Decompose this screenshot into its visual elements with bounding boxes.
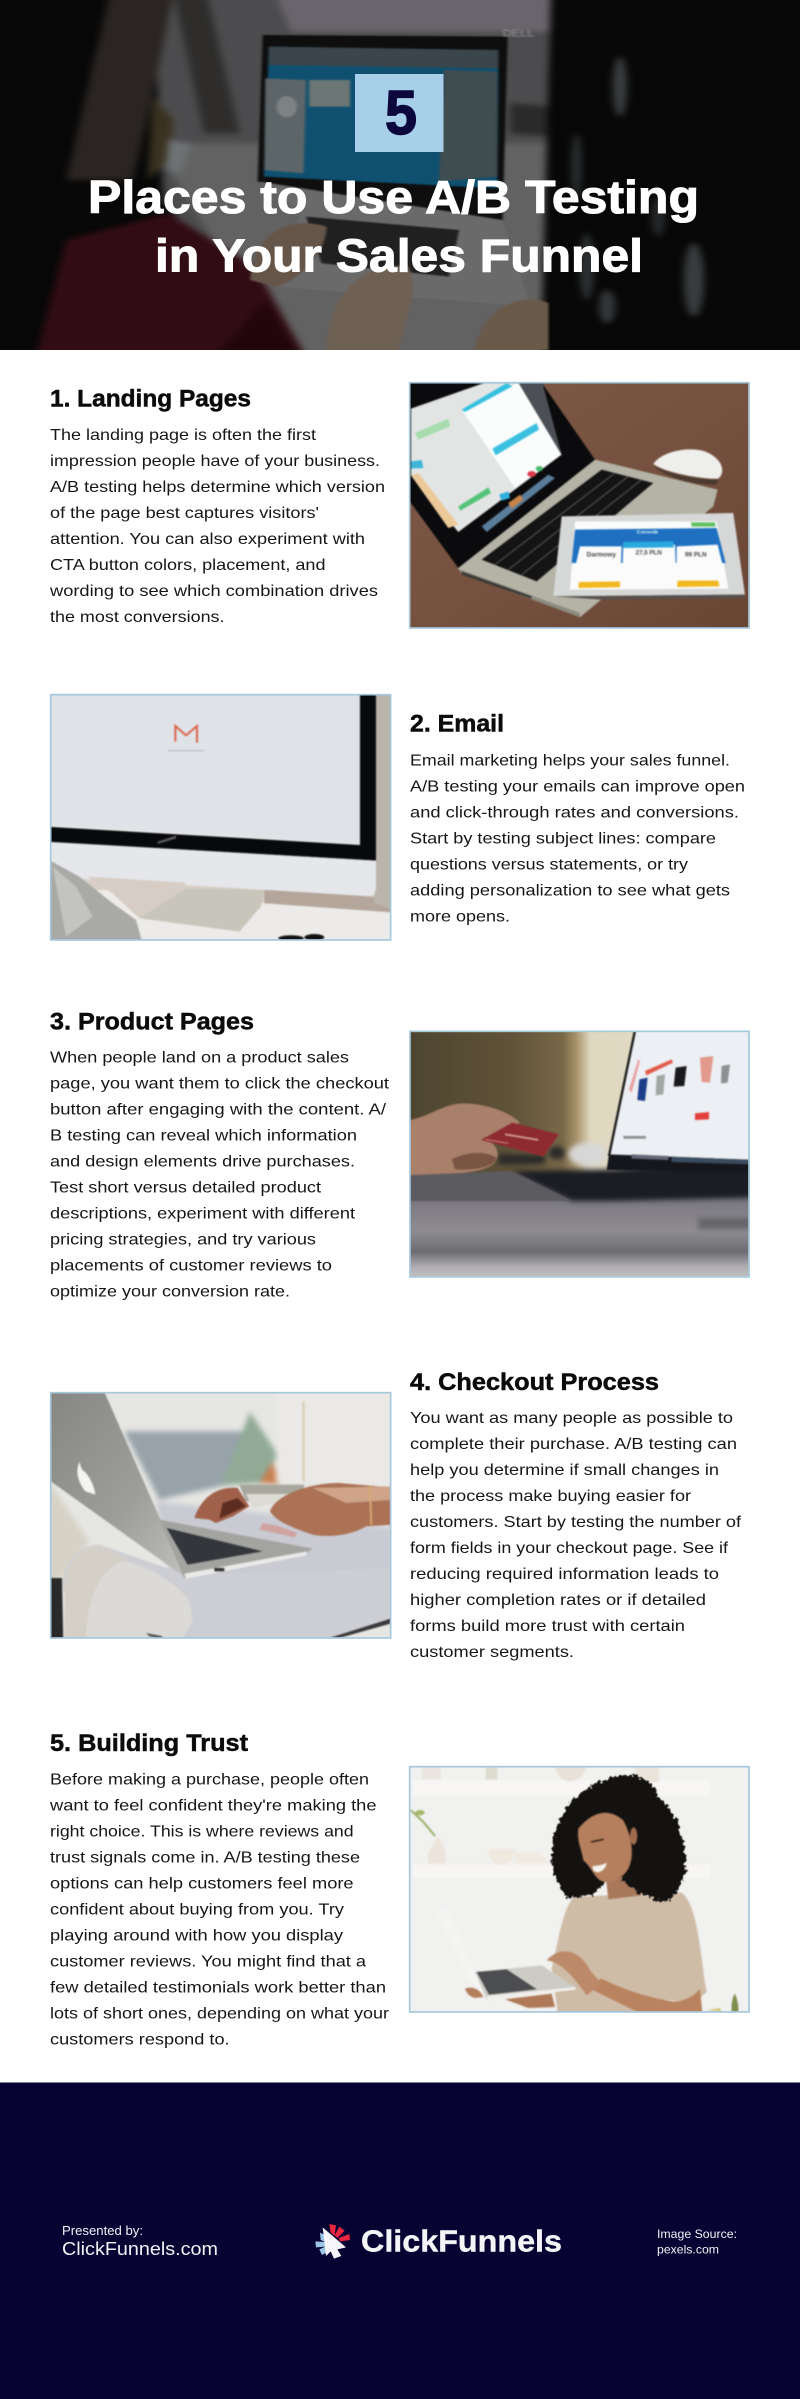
body text 3: optimize your conversion rate. bbox=[50, 1283, 290, 1300]
body text 1: The landing page is often the first bbox=[50, 427, 317, 444]
hero background photo: DELL bbox=[503, 27, 534, 39]
body text 2 bbox=[410, 753, 745, 926]
body text 5: options can help customers feel more bbox=[50, 1876, 354, 1892]
body text 3: button after engaging with the content. A/ bbox=[50, 1101, 387, 1118]
body text 3: When people land on a product sales bbox=[50, 1049, 349, 1066]
photo: person paying by card on silver laptop bbox=[46, 1388, 396, 1644]
body text 4: the process make buying easier for bbox=[410, 1488, 692, 1505]
body text 3: and design elements drive purchases. bbox=[50, 1153, 355, 1170]
body text 1: the most conversions. bbox=[50, 609, 225, 626]
body text 5: trust signals come in. A/B testing these bbox=[50, 1850, 360, 1866]
body text 3: placements of customer reviews to bbox=[50, 1257, 332, 1274]
body text 2: adding personalization to see what gets bbox=[410, 883, 730, 900]
presented by credit bbox=[62, 2223, 218, 2259]
presented by credit: Presented by: bbox=[62, 2223, 143, 2238]
body text 1: of the page best captures visitors' bbox=[50, 505, 319, 522]
logo wordmark: ClickFunnels bbox=[361, 2224, 562, 2259]
heading 2: 2. Email bbox=[410, 710, 504, 738]
heading 4: 4. Checkout Process bbox=[410, 1369, 659, 1396]
section 1: landing pages bbox=[49, 378, 755, 634]
body text 5: right choice. This is where reviews and bbox=[50, 1824, 354, 1840]
body text 4: customer segments. bbox=[410, 1644, 574, 1661]
body text 3: descriptions, experiment with different bbox=[50, 1205, 356, 1222]
body text 4: customers. Start by testing the number of bbox=[410, 1514, 742, 1531]
section 4: checkout process bbox=[46, 1369, 742, 1661]
body text 4: complete their purchase. A/B testing can bbox=[410, 1436, 737, 1453]
body text 4: You want as many people as possible to bbox=[410, 1410, 733, 1427]
body text 3 bbox=[50, 1049, 390, 1300]
body text 2: questions versus statements, or try bbox=[410, 857, 688, 874]
body text 5: want to feel confident they're making the bbox=[49, 1798, 377, 1814]
photo: laptop and tablet on wood desk: Darmowy bbox=[587, 552, 617, 558]
body text 4: higher completion rates or if detailed bbox=[410, 1592, 706, 1609]
logo icon: cursor with burst bbox=[315, 2224, 350, 2259]
photo: laptop and tablet on wood desk: 99 PLN bbox=[685, 552, 707, 558]
photo: monitor with Gmail logo bbox=[46, 690, 396, 946]
body text 5: playing around with how you display bbox=[50, 1928, 343, 1944]
body text 1: attention. You can also experiment with bbox=[50, 531, 365, 548]
photo: hand holding red credit card at laptop bbox=[405, 1026, 755, 1282]
body text 3: B testing can reveal which information bbox=[50, 1127, 357, 1144]
body text 1: wording to see which combination drives bbox=[49, 583, 378, 600]
photo: laptop and tablet on wood desk: 27,5 PLN bbox=[636, 551, 662, 557]
number badge bbox=[355, 74, 444, 152]
neck bbox=[606, 1876, 642, 1900]
body text 3: page, you want them to click the checkout bbox=[50, 1075, 390, 1092]
image source credit: pexels.com bbox=[657, 2242, 719, 2256]
hero title: Places to Use A/B Testing bbox=[88, 171, 699, 223]
hero title bbox=[88, 171, 699, 282]
body text 5: lots of short ones, depending on what your bbox=[50, 2006, 390, 2022]
image source credit bbox=[657, 2227, 737, 2256]
body text 1: CTA button colors, placement, and bbox=[50, 557, 326, 574]
footer bbox=[0, 2082, 800, 2399]
body text 4: forms build more trust with certain bbox=[410, 1618, 685, 1635]
heading 1: 1. Landing Pages bbox=[50, 386, 251, 412]
body text 5: Before making a purchase, people often bbox=[50, 1772, 369, 1788]
body text 4: form fields in your checkout page. See if bbox=[410, 1540, 729, 1557]
photo: laptop and tablet on wood desk bbox=[405, 378, 755, 634]
body text 2: more opens. bbox=[410, 909, 510, 926]
photo: laptop and tablet on wood desk: Cennik bbox=[637, 530, 659, 535]
body text 3: Test short versus detailed product bbox=[50, 1179, 322, 1196]
body text 1: impression people have of your business. bbox=[50, 453, 380, 470]
hero background photo bbox=[0, 0, 800, 357]
body text 5: customer reviews. You might find that a bbox=[50, 1954, 366, 1970]
section 5: building trust bbox=[49, 1730, 755, 2048]
body text 5: confident about buying from you. Try bbox=[50, 1902, 344, 1918]
hero title: in Your Sales Funnel bbox=[155, 230, 643, 282]
body text 2: A/B testing your emails can improve open bbox=[410, 779, 745, 796]
body text 5: few detailed testimonials work better than bbox=[50, 1980, 386, 1996]
shirt bbox=[552, 1893, 707, 2018]
ClickFunnels logo bbox=[315, 2224, 562, 2259]
body text 3: pricing strategies, and try various bbox=[50, 1231, 316, 1248]
body text 4: reducing required information leads to bbox=[410, 1566, 719, 1583]
photo: smiling woman with laptop bbox=[405, 1762, 755, 2018]
hair bbox=[552, 1775, 686, 1902]
heading 3: 3. Product Pages bbox=[50, 1008, 254, 1036]
body text 2: and click-through rates and conversions. bbox=[410, 805, 739, 822]
section 2: email bbox=[46, 690, 745, 946]
body text 2: Start by testing subject lines: compare bbox=[410, 831, 716, 848]
presented by credit: ClickFunnels.com bbox=[62, 2239, 218, 2259]
section 3: product pages bbox=[50, 1008, 755, 1300]
body text 4: help you determine if small changes in bbox=[410, 1462, 719, 1479]
body text 5: customers respond to. bbox=[50, 2032, 230, 2048]
heading 5: 5. Building Trust bbox=[50, 1730, 248, 1757]
number badge: 5 bbox=[385, 79, 417, 148]
body text 1 bbox=[49, 427, 385, 626]
body text 1: A/B testing helps determine which version bbox=[50, 479, 385, 496]
body text 2: Email marketing helps your sales funnel. bbox=[410, 753, 730, 770]
body text 5 bbox=[49, 1772, 390, 2048]
image source credit: Image Source: bbox=[657, 2227, 737, 2241]
hero banner bbox=[0, 0, 800, 357]
body text 4 bbox=[410, 1410, 742, 1661]
